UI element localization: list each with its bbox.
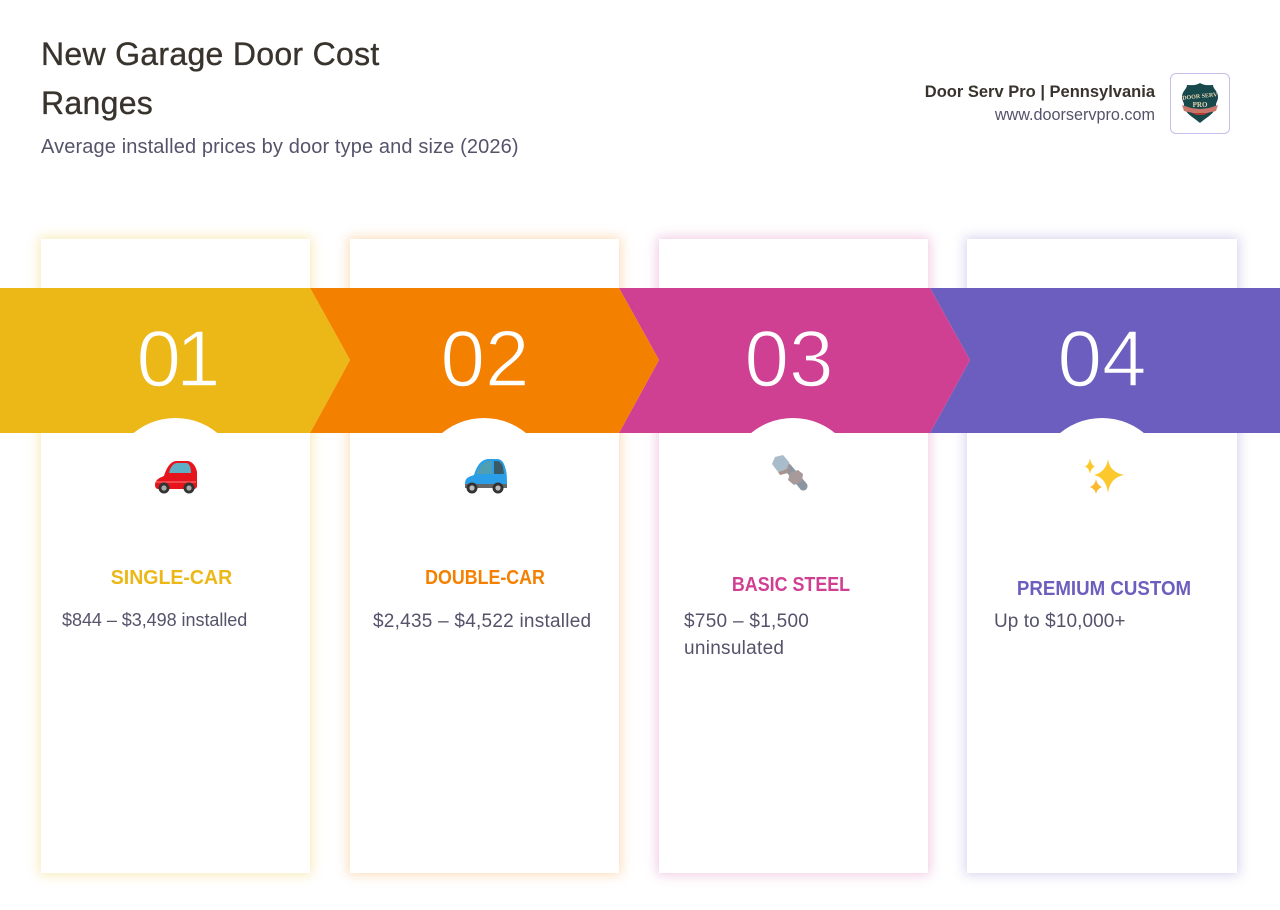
price: premium custom: Up to $10,000+: [994, 611, 1126, 632]
logo: PRO: [1193, 101, 1208, 109]
icon: nut and bolt: [772, 455, 808, 490]
step number 03: 03: [744, 314, 833, 403]
brand website: www.doorservpro.com: [995, 106, 1155, 124]
brand name: Door Serv Pro | Pennsylvania: [925, 83, 1155, 101]
price: basic steel: uninsulated: [684, 638, 784, 659]
title: [41, 36, 380, 121]
icon: blue car: [465, 459, 507, 494]
arrow: purple segment: [930, 288, 1280, 433]
label: basic steel: BASIC STEEL: [732, 574, 850, 596]
arrow band: [0, 288, 1280, 433]
panel: single-car card: [41, 239, 310, 873]
logo: [1170, 73, 1230, 134]
step number 02: 02: [440, 314, 529, 403]
arrow: pink segment: [619, 288, 970, 433]
step number 04: 04: [1058, 314, 1146, 403]
price: basic steel: [684, 611, 809, 659]
label: premium custom: PREMIUM CUSTOM: [1017, 578, 1191, 600]
step number 01: 01: [136, 314, 215, 403]
title: New Garage Door Cost: [41, 36, 380, 72]
icon: red car: [155, 461, 197, 494]
panel: premium custom card: [967, 239, 1237, 873]
panel: basic steel card: [659, 239, 928, 873]
title: Ranges: [41, 85, 153, 121]
icon: sparkles: [1085, 458, 1124, 494]
logo: DOOR SERV: [1182, 92, 1218, 102]
price: basic steel: $750 – $1,500: [684, 611, 809, 632]
subtitle: Average installed prices by door type and size (2026): [41, 136, 519, 158]
label: single-car: SINGLE-CAR: [111, 567, 232, 589]
label: double-car: DOUBLE-CAR: [425, 567, 545, 589]
price: double-car: $2,435 – $4,522 installed: [373, 611, 591, 632]
hill cutouts: [110, 418, 1168, 550]
price: single-car: $844 – $3,498 installed: [62, 610, 247, 630]
arrow: yellow segment: [0, 288, 350, 433]
panel: double-car card: [350, 239, 619, 873]
arrow: orange segment: [310, 288, 659, 433]
